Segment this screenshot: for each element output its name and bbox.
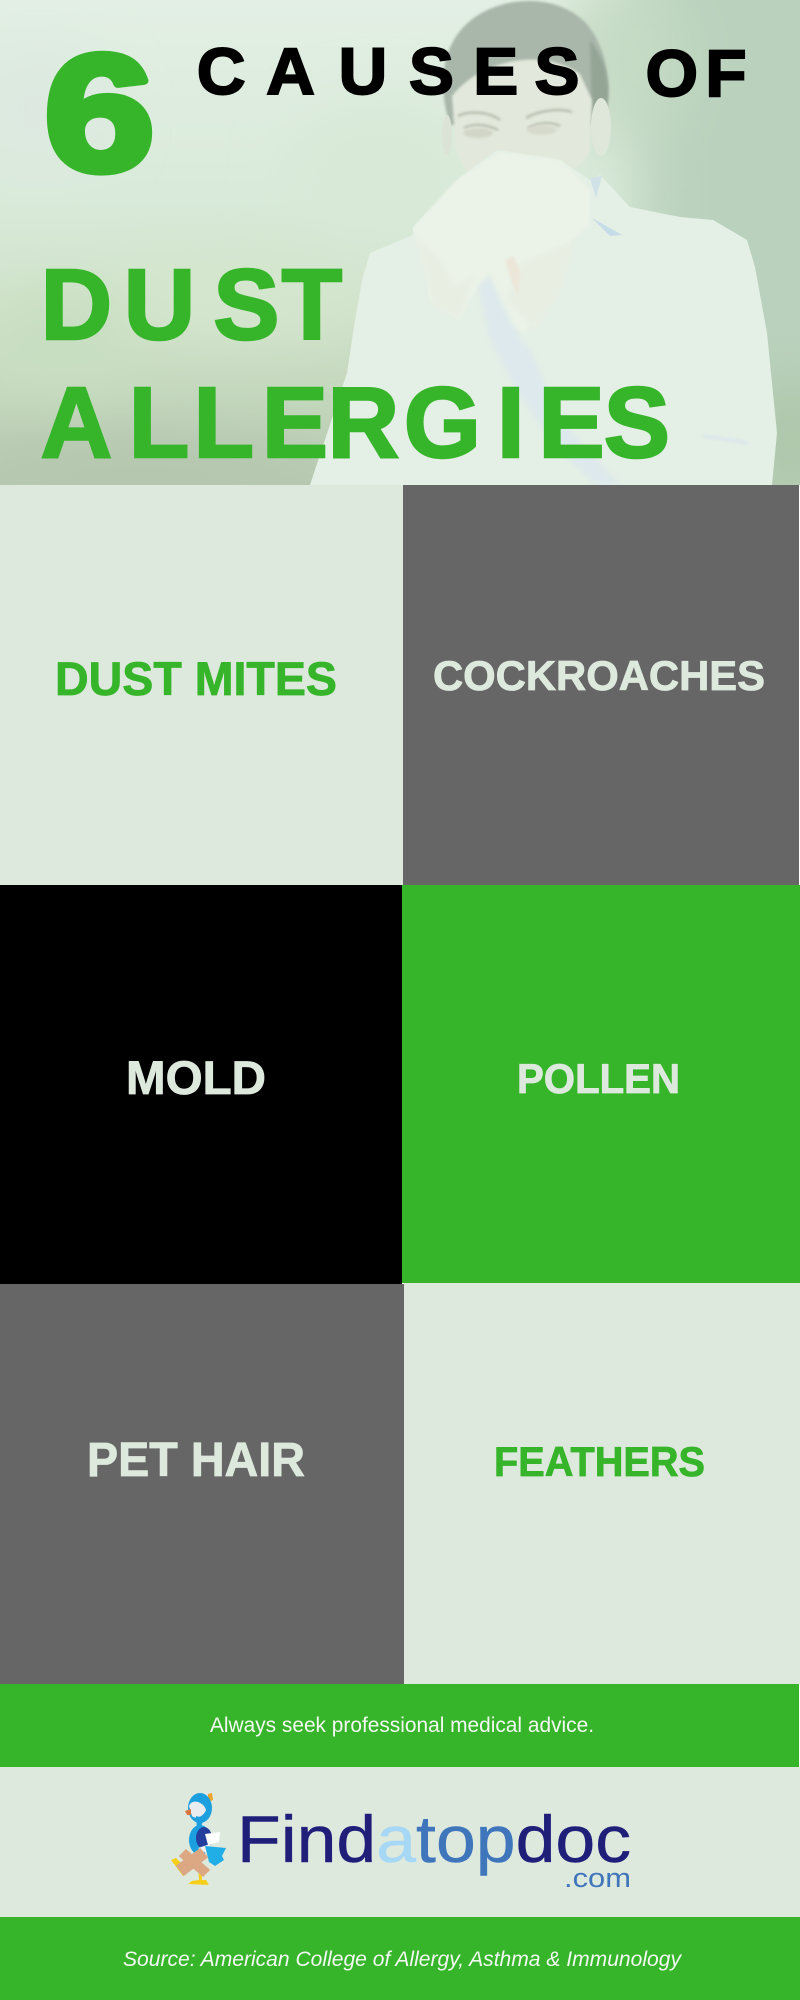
logo: bird mascot bbox=[171, 1793, 226, 1885]
panel: dust mites bbox=[0, 485, 403, 885]
eyes and brows bbox=[458, 110, 572, 130]
title: allergies: ALLERGIES bbox=[41, 368, 670, 479]
logo: wordmark: Findatopdoc bbox=[237, 1802, 631, 1876]
ears bbox=[591, 98, 611, 156]
panel: cockroaches: COCKROACHES bbox=[433, 652, 765, 699]
panel: pollen: POLLEN bbox=[517, 1055, 680, 1102]
source banner: Source: American College of Allergy, Asthma & Immunology bbox=[123, 1948, 682, 1971]
face bbox=[452, 60, 592, 183]
title: dust: DUST bbox=[41, 250, 342, 361]
hands and tissue bbox=[413, 152, 590, 333]
panel: pet hair bbox=[0, 1284, 404, 1684]
hair bbox=[442, 1, 611, 183]
panel: pollen bbox=[402, 885, 800, 1283]
blue shirt front bbox=[494, 291, 512, 326]
hero photo background: man sneezing into a tissue bbox=[0, 0, 800, 485]
panel: feathers bbox=[404, 1283, 800, 1684]
shirt bbox=[310, 150, 777, 485]
title: causes of: CAUSESOF bbox=[197, 36, 746, 111]
logo band bbox=[0, 1767, 800, 1917]
advice banner bbox=[0, 1684, 799, 1767]
logo: dot com: .com bbox=[564, 1863, 631, 1893]
panel: mold bbox=[0, 885, 402, 1284]
panel: mold: MOLD bbox=[126, 1051, 266, 1104]
panel: pet hair: PET HAIR bbox=[87, 1434, 305, 1487]
advice banner: Always seek professional medical advice. bbox=[210, 1714, 594, 1737]
title: number 6: 6 bbox=[44, 21, 155, 205]
panel: dust mites: DUST MITES bbox=[55, 652, 337, 705]
panel: cockroaches bbox=[403, 485, 799, 885]
panel: feathers: FEATHERS bbox=[494, 1438, 705, 1485]
source banner bbox=[0, 1917, 800, 2000]
